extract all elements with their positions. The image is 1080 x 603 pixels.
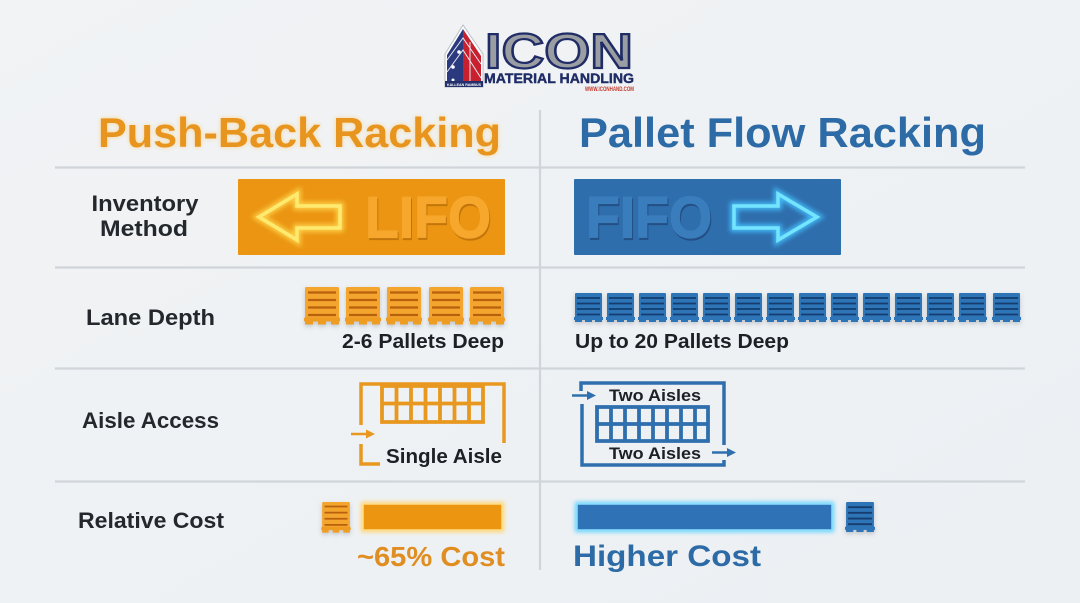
row label: Inventory Method: Inventory [92,191,199,216]
pallets: five orange [304,287,505,324]
panel: LIFO badge [238,179,505,255]
icon: logo tower [445,25,483,87]
pallets: fourteen blue [574,293,1021,322]
icon: right neon arrow [734,194,817,240]
diagram: single aisle [351,384,504,464]
text: Higher Cost: Higher Cost [573,540,761,573]
bar: pallet flow cost [575,502,834,532]
heading: Pallet Flow Racking: Pallet Flow Racking [579,109,986,156]
text: Up to 20 Pallets Deep: Up to 20 Pallets Deep [575,331,789,353]
grid lines [55,168,1025,482]
logo url: WWW.ICONHAND.COM [585,87,634,93]
row label: Relative Cost: Relative Cost [78,508,225,533]
flow rack grid [597,407,708,441]
LIFO text: LIFO [365,186,491,250]
row label: Aisle Access: Aisle Access [82,408,219,433]
text: 2-6 Pallets Deep: 2-6 Pallets Deep [342,331,504,353]
logo: Icon Material Handling [445,25,634,93]
logo badge text: KALLEAN RAMBUS [447,82,481,87]
icon: orange cost pallet [321,502,351,533]
heading: Push-Back Racking: Push-Back Racking [98,109,501,156]
logo tagline: MATERIAL HANDLING [484,71,634,86]
panel: FIFO badge [574,179,841,255]
heading: Push-Back Racking: Push-Back Racking [98,109,501,156]
row label: Lane Depth: Lane Depth [86,305,215,330]
rack frame [361,384,504,443]
lower bracket [361,444,380,464]
FIFO text: FIFO [586,186,712,250]
bar: push-back cost [361,502,504,532]
text: Two Aisles top: Two Aisles [609,386,701,405]
icon: left neon arrow [259,194,340,240]
rack grid [382,386,483,422]
flow frame [581,383,724,465]
text: Two Aisles bottom: Two Aisles [609,444,701,463]
arrow in [572,391,596,400]
logo wordmark ICON: ICON [485,25,633,79]
icon: blue cost pallet [845,502,875,532]
row label: Inventory Method [92,191,199,241]
diagram: two aisles [572,383,736,465]
row label: Inventory Method: Method [100,216,188,241]
FIFO text: FIFO [587,188,713,252]
text: Single Aisle: Single Aisle [386,446,502,468]
text: ~65% Cost: ~65% Cost [357,541,505,572]
LIFO text: LIFO [366,188,492,252]
arrow out [712,448,736,457]
arrow in [351,430,375,438]
